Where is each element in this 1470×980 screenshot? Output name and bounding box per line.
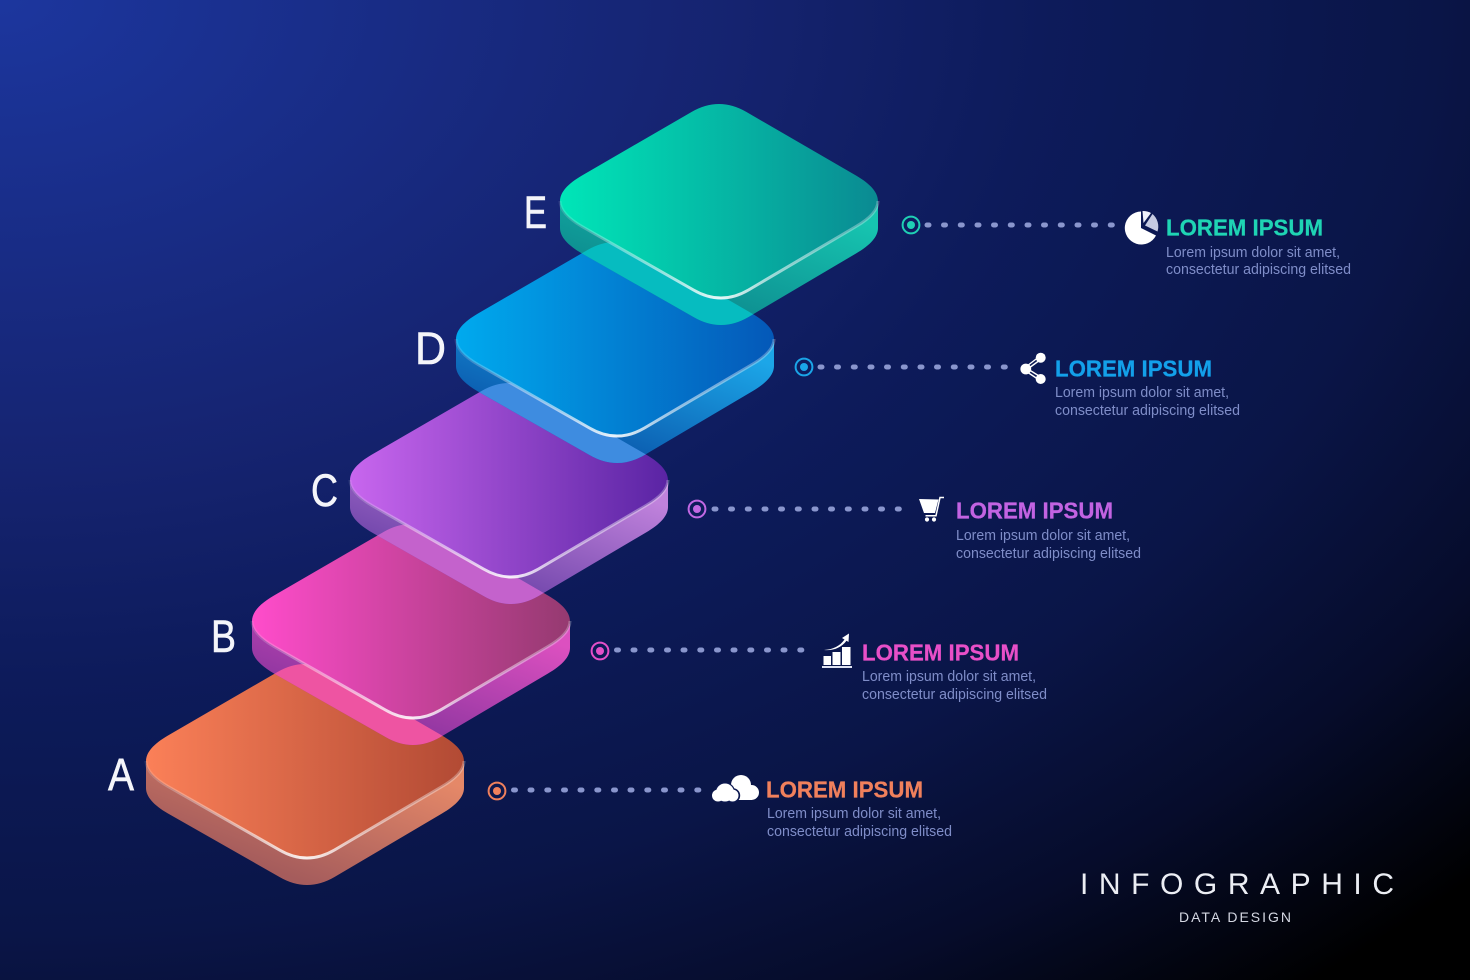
letter B: B	[211, 611, 236, 662]
text block B: LOREM IPSUM	[862, 640, 1019, 666]
text block C: LOREM IPSUM	[956, 498, 1113, 524]
text block C: consectetur adipiscing elitsed	[956, 546, 1141, 562]
connector A	[489, 783, 701, 799]
text block E	[1166, 214, 1351, 278]
text block B: Lorem ipsum dolor sit amet,	[862, 669, 1036, 685]
letter A: A	[108, 749, 134, 800]
plate A: orange isometric block	[146, 664, 464, 885]
plate B: pink isometric block	[250, 524, 572, 745]
letter D: D	[415, 323, 446, 374]
text block E: Lorem ipsum dolor sit amet,	[1166, 245, 1340, 261]
icon: shopping cart	[919, 498, 944, 522]
text block A: Lorem ipsum dolor sit amet,	[767, 806, 941, 822]
icon: clouds	[712, 775, 759, 803]
icon: pie chart	[1125, 211, 1158, 244]
connector C	[689, 501, 902, 517]
text block D: consectetur adipiscing elitsed	[1055, 403, 1240, 419]
subtitle: DATA DESIGN	[1179, 909, 1291, 925]
text block A: consectetur adipiscing elitsed	[767, 824, 952, 840]
plate D: blue isometric block	[454, 242, 776, 463]
text block A: LOREM IPSUM	[766, 776, 923, 802]
connector D	[796, 359, 1008, 375]
text block C	[956, 498, 1141, 562]
text block D	[1055, 356, 1240, 419]
letter C: C	[311, 465, 338, 516]
text block B: consectetur adipiscing elitsed	[862, 687, 1047, 703]
text block D: LOREM IPSUM	[1055, 356, 1212, 382]
connector B	[592, 643, 804, 659]
plate E: teal isometric block	[558, 104, 880, 325]
icon: growth bar chart	[822, 634, 852, 668]
text block A	[766, 776, 952, 840]
text block E: LOREM IPSUM	[1166, 214, 1323, 240]
text block C: Lorem ipsum dolor sit amet,	[956, 528, 1130, 544]
text block B	[862, 640, 1047, 703]
letter E: E	[524, 187, 547, 238]
plate C: purple isometric block	[348, 384, 670, 604]
title: INFOGRAPHIC	[1080, 868, 1394, 901]
text block D: Lorem ipsum dolor sit amet,	[1055, 385, 1229, 401]
connector E	[903, 217, 1115, 233]
text block E: consectetur adipiscing elitsed	[1166, 262, 1351, 278]
icon: share	[1020, 353, 1046, 384]
